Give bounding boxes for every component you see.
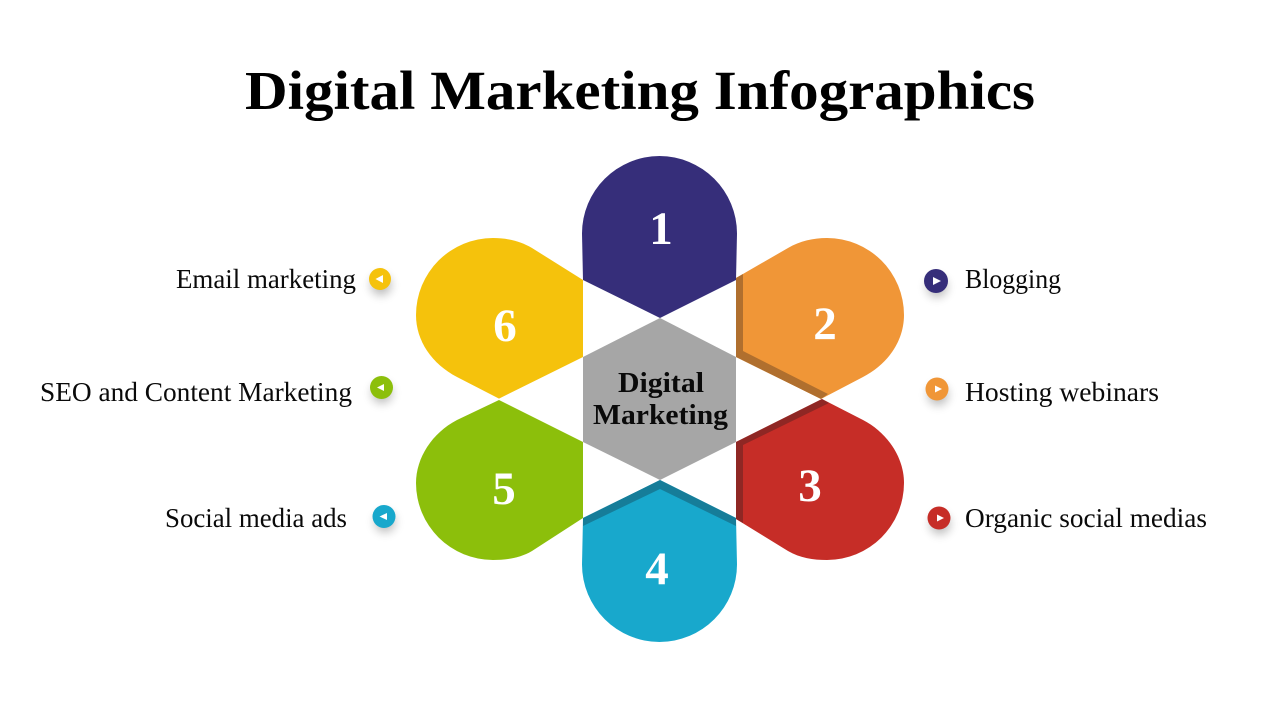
petal 2: 2: [813, 298, 837, 350]
hexagon diagram: [416, 156, 904, 642]
petal 2: [736, 238, 904, 399]
petal 1: [582, 156, 737, 318]
petal 5: 5: [492, 463, 516, 515]
label: Hosting webinars: Hosting webinars: [965, 377, 1159, 407]
label: SEO and Content Marketing: SEO and Content Marketing: [40, 377, 352, 407]
petal 6: 6: [493, 300, 517, 352]
petal 5: [416, 400, 583, 560]
title: Digital Marketing Infographics: [245, 60, 1035, 121]
label: Organic social medias: Organic social medias: [965, 503, 1207, 533]
petal 4: [582, 480, 737, 642]
label: Blogging: Blogging: [965, 264, 1061, 294]
label: Blogging: [924, 264, 1061, 297]
center hexagon: Digital: [618, 367, 704, 399]
petal 6: [416, 238, 583, 399]
petal 1: 1: [649, 203, 673, 255]
petal 3: [736, 399, 904, 560]
label: Social media ads: Social media ads: [165, 503, 347, 533]
label: Email marketing: Email marketing: [176, 264, 356, 294]
petal 4: 4: [645, 543, 669, 595]
center hexagon: Marketing: [593, 399, 729, 431]
petal 3: 3: [798, 460, 822, 512]
center hexagon: [583, 318, 736, 480]
